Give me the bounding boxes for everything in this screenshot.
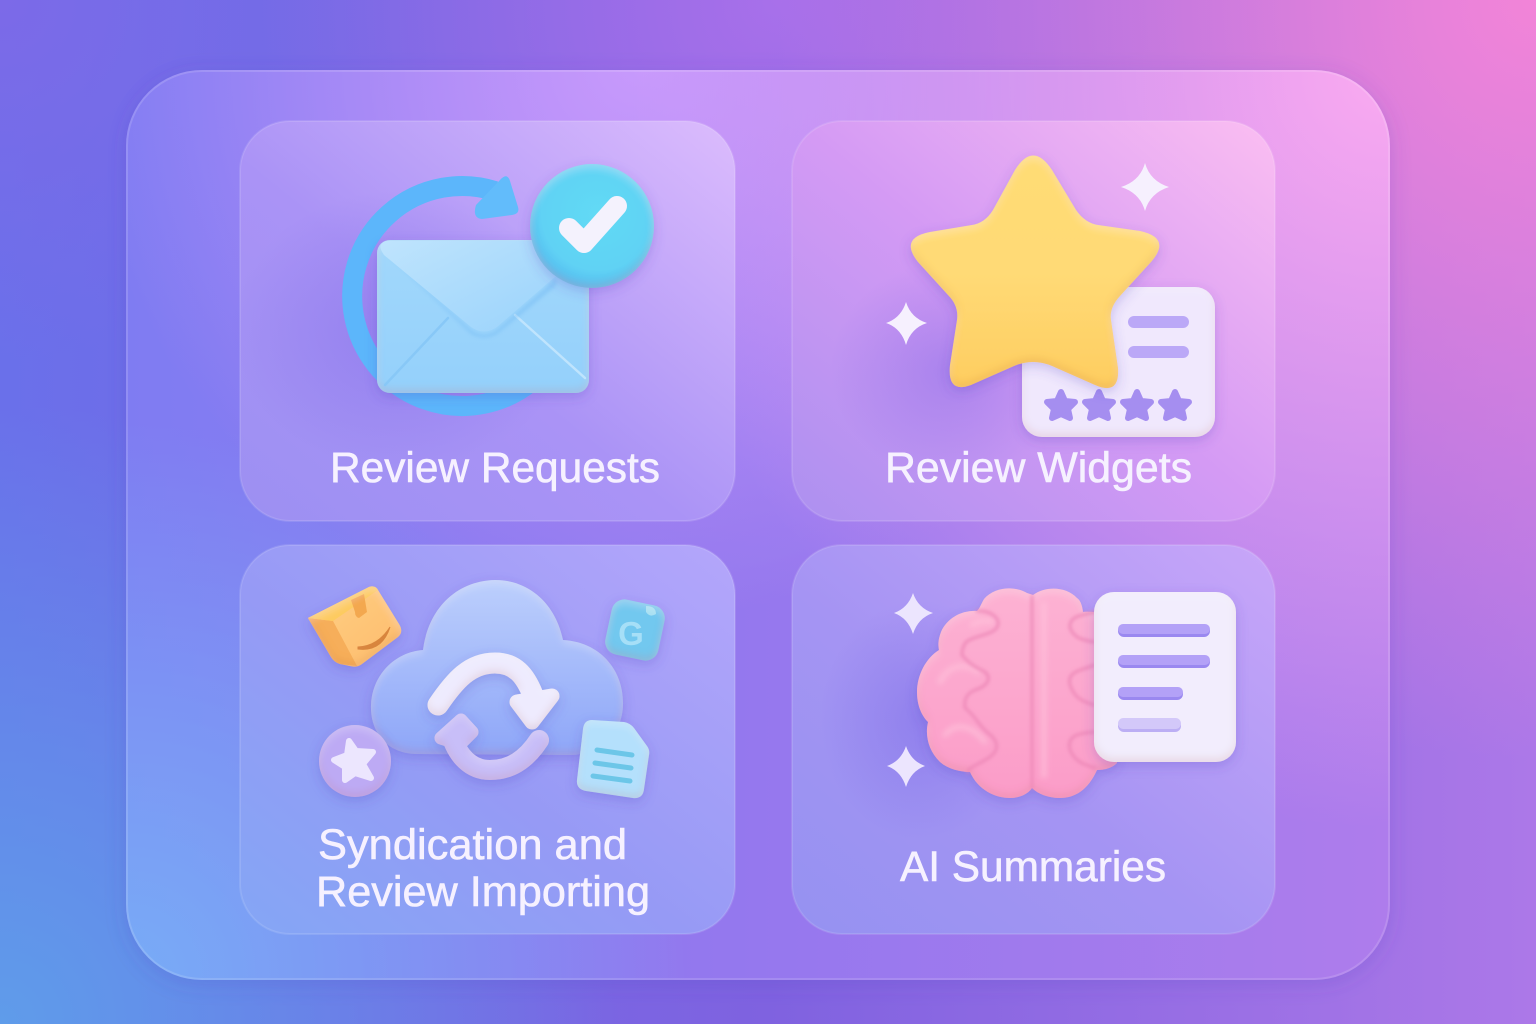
rating stars	[1047, 392, 1189, 418]
review card	[1022, 287, 1215, 437]
card background	[240, 545, 735, 934]
sparkle left	[886, 302, 927, 345]
icon shadow glow	[830, 260, 1070, 480]
brain fold highlights	[940, 604, 1044, 776]
panel: Review Requests card	[230, 121, 735, 521]
icon: cloud sync with sources	[308, 580, 667, 798]
panel: outer glass container	[126, 70, 1390, 980]
sparkle top	[894, 593, 933, 634]
icon: G tile: G	[618, 615, 644, 652]
icon: G tile	[603, 597, 667, 663]
brain folds	[962, 596, 1095, 788]
panel: AI Summaries card	[792, 545, 1275, 934]
card background	[792, 121, 1275, 521]
document lines	[593, 750, 632, 781]
circular arrow	[352, 176, 532, 406]
panel: Review Widgets card	[792, 121, 1275, 521]
sync arrow top	[438, 663, 552, 722]
check badge	[530, 164, 654, 288]
icon: star badge	[319, 725, 391, 797]
icon: star with review card	[886, 156, 1215, 437]
card background	[240, 121, 735, 521]
label: Review Requests: Review Requests	[330, 444, 660, 492]
icon: box	[308, 586, 401, 667]
cloud	[371, 580, 623, 755]
sync arrow bottom	[441, 720, 539, 770]
document lines	[1118, 624, 1210, 732]
label: Syndication and Review Importing: Review Importing	[316, 868, 650, 916]
brain	[917, 588, 1117, 798]
icon: envelope with circular arrow and check	[352, 164, 654, 406]
review text lines	[1128, 316, 1189, 358]
label: Review Widgets: Review Widgets	[885, 444, 1192, 492]
flap shadow	[384, 252, 556, 338]
card background	[792, 545, 1275, 934]
envelope	[377, 240, 589, 393]
label: AI Summaries: AI Summaries	[900, 843, 1166, 891]
envelope fold lines	[385, 315, 585, 385]
large gold star	[911, 156, 1159, 388]
envelope flap	[380, 241, 557, 332]
icon: brain with document	[887, 588, 1236, 798]
sparkle bottom	[887, 746, 925, 787]
label: Syndication and Review Importing: Syndication and	[318, 821, 627, 869]
icon shadow glow	[230, 190, 570, 470]
icon shadow glow	[820, 600, 1020, 840]
sparkle top right	[1121, 163, 1169, 211]
summary document	[1094, 592, 1236, 762]
icon: document	[577, 720, 649, 798]
panel: Syndication and Review Importing card	[240, 545, 735, 934]
